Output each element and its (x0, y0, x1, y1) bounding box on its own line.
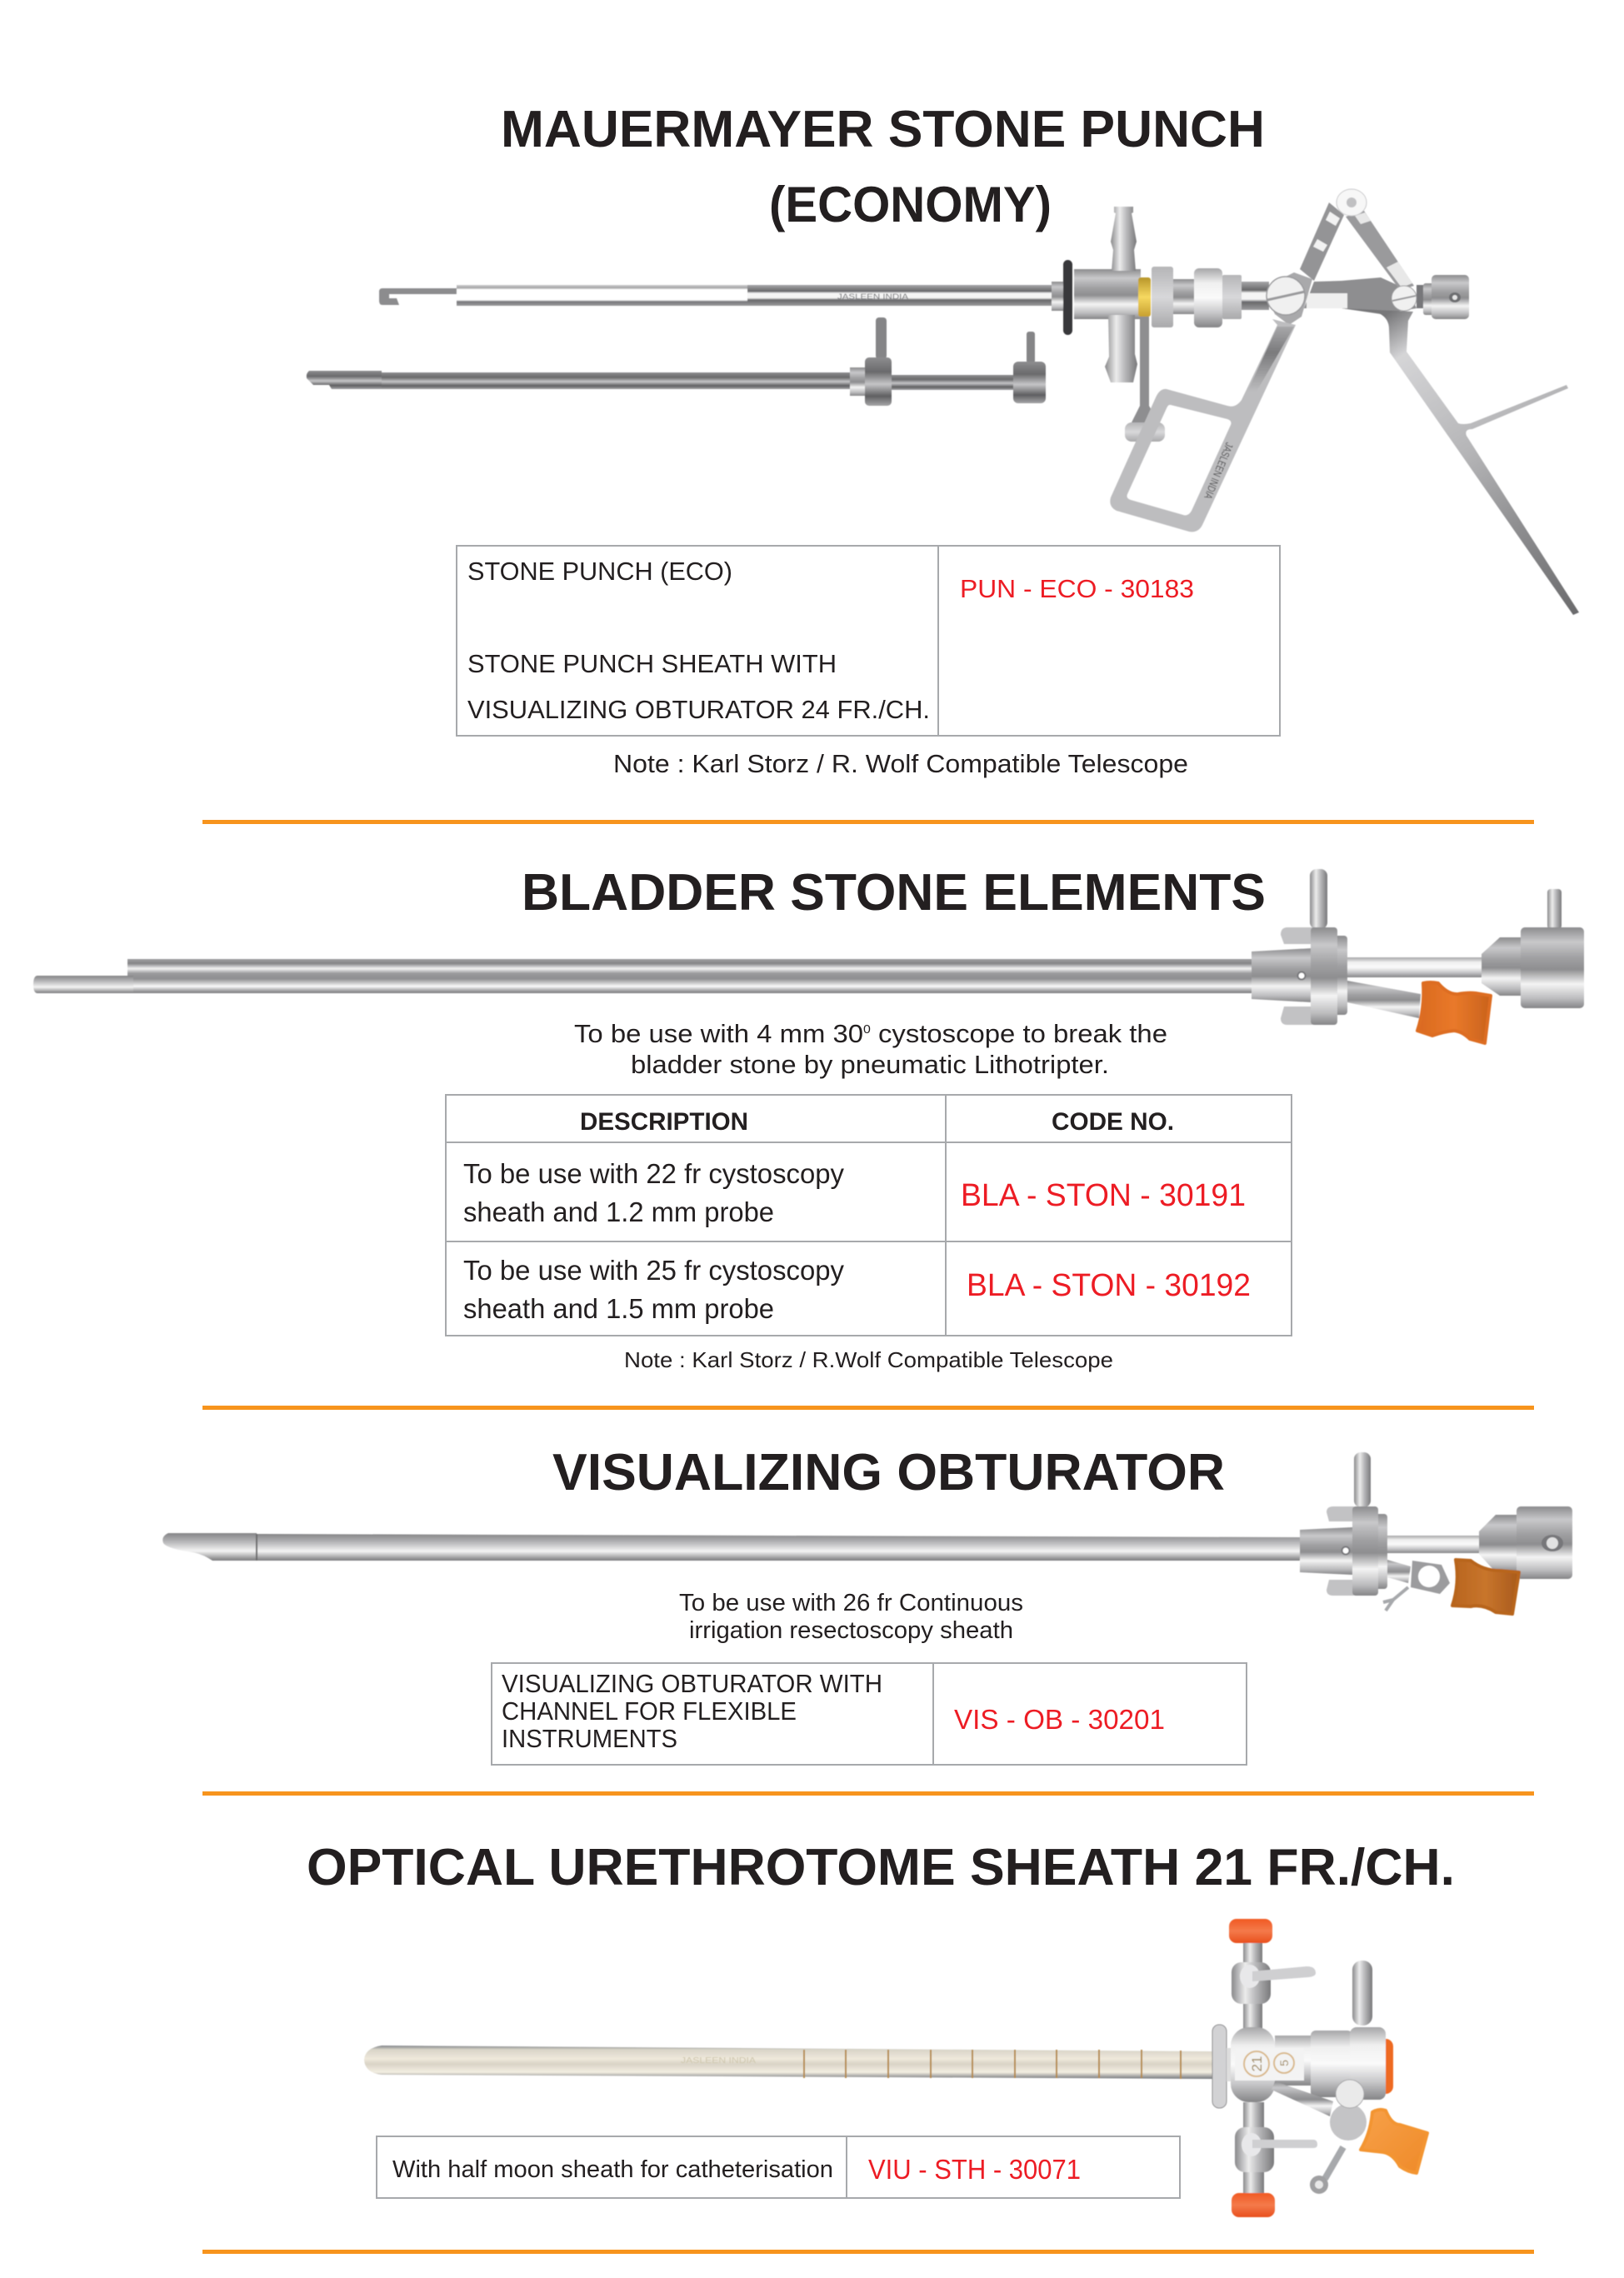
section: Optical urethrotome sheath (307, 1839, 1455, 2217)
section: Visualizing obturator (162, 1444, 1572, 1765)
description: bladder stone use: 0 (863, 1022, 871, 1037)
illustration: stone punch instrument (379, 189, 1579, 615)
subtitle: Economy: (ECONOMY) (769, 177, 1052, 232)
table: bladder stone codes: DESCRIPTION (580, 1108, 748, 1136)
table: stone punch codes: STONE PUNCH (ECO) (467, 557, 732, 586)
illustration: bladder stone element (33, 869, 1584, 1043)
table: urethrotome code: VIU - STH - 30071 (868, 2154, 1081, 2185)
section: Bladder stone elements (33, 864, 1584, 1372)
title: Bladder Stone Elements: BLADDER STONE ELEMENTS (522, 864, 1266, 922)
title: Mauermayer Stone Punch: MAUERMAYER STONE PUNCH (501, 101, 1265, 158)
table: bladder stone codes: To be use with 22 fr cystoscopy (463, 1158, 844, 1189)
illustration: visualizing obturator (162, 1452, 1572, 1614)
description: bladder stone use (574, 1019, 1167, 1079)
table: bladder stone codes: sheath and 1.5 mm probe (463, 1293, 774, 1324)
description: bladder stone use: To be use with 4 mm 30 (574, 1019, 847, 1048)
table: urethrotome code (377, 2136, 1180, 2198)
title: Visualizing Obturator: VISUALIZING OBTURATOR (552, 1444, 1225, 1501)
illustration: sheath with obturator (307, 317, 1046, 406)
description: obturator use: To be use with 26 fr Continuous (679, 1590, 1023, 1616)
title: Optical Urethrotome Sheath: OPTICAL URETHROTOME SHEATH 21 FR./CH. (307, 1839, 1455, 1896)
illustration: stone punch instrument: JASLEEN INDIA (837, 292, 908, 301)
table: stone punch codes: STONE PUNCH SHEATH WITH (467, 649, 837, 678)
table: bladder stone codes: BLA - STON - 30192 (967, 1268, 1251, 1303)
illustration: urethrotome sheath: JASLEEN INDIA (681, 2056, 756, 2066)
table: obturator codes: INSTRUMENTS (502, 1724, 677, 1753)
table: urethrotome code: With half moon sheath for catheterisation (392, 2156, 833, 2183)
description: obturator use (679, 1590, 1023, 1644)
illustration: urethrotome sheath: 5 (1277, 2060, 1291, 2066)
illustration: urethrotome sheath (364, 1919, 1427, 2217)
illustration: stone punch instrument: JASLEEN INDIA (1202, 441, 1236, 501)
table: obturator codes: CHANNEL FOR FLEXIBLE (502, 1696, 797, 1726)
illustration: urethrotome sheath: 21 (1249, 2056, 1265, 2071)
description: obturator use: irrigation resectoscopy sheath (689, 1617, 1013, 1644)
table: stone punch codes: PUN - ECO - 30183 (960, 574, 1194, 603)
table: obturator codes (492, 1663, 1247, 1765)
table: obturator codes: VIS - OB - 30201 (954, 1704, 1165, 1735)
table: stone punch codes: VISUALIZING OBTURATOR 24 FR./CH. (467, 695, 930, 724)
table: bladder stone codes: To be use with 25 fr cystoscopy (463, 1255, 844, 1286)
table: stone punch codes (457, 546, 1280, 736)
section: Mauermayer stone punch (307, 101, 1579, 778)
note: compatible telescope: Note : Karl Storz / R. Wolf Compatible Telescope (613, 749, 1188, 778)
table: obturator codes: VISUALIZING OBTURATOR WITH (502, 1669, 882, 1698)
table: bladder stone codes (446, 1095, 1292, 1336)
note: compatible telescope: Note : Karl Storz / R.Wolf Compatible Telescope (624, 1347, 1113, 1372)
table: bladder stone codes: CODE NO. (1052, 1108, 1174, 1136)
description: bladder stone use: bladder stone by pneumatic Lithotripter. (631, 1050, 1109, 1079)
table: bladder stone codes: BLA - STON - 30191 (961, 1178, 1246, 1213)
table: bladder stone codes: sheath and 1.2 mm probe (463, 1196, 774, 1227)
description: bladder stone use: cystoscope to break the (871, 1019, 1167, 1048)
